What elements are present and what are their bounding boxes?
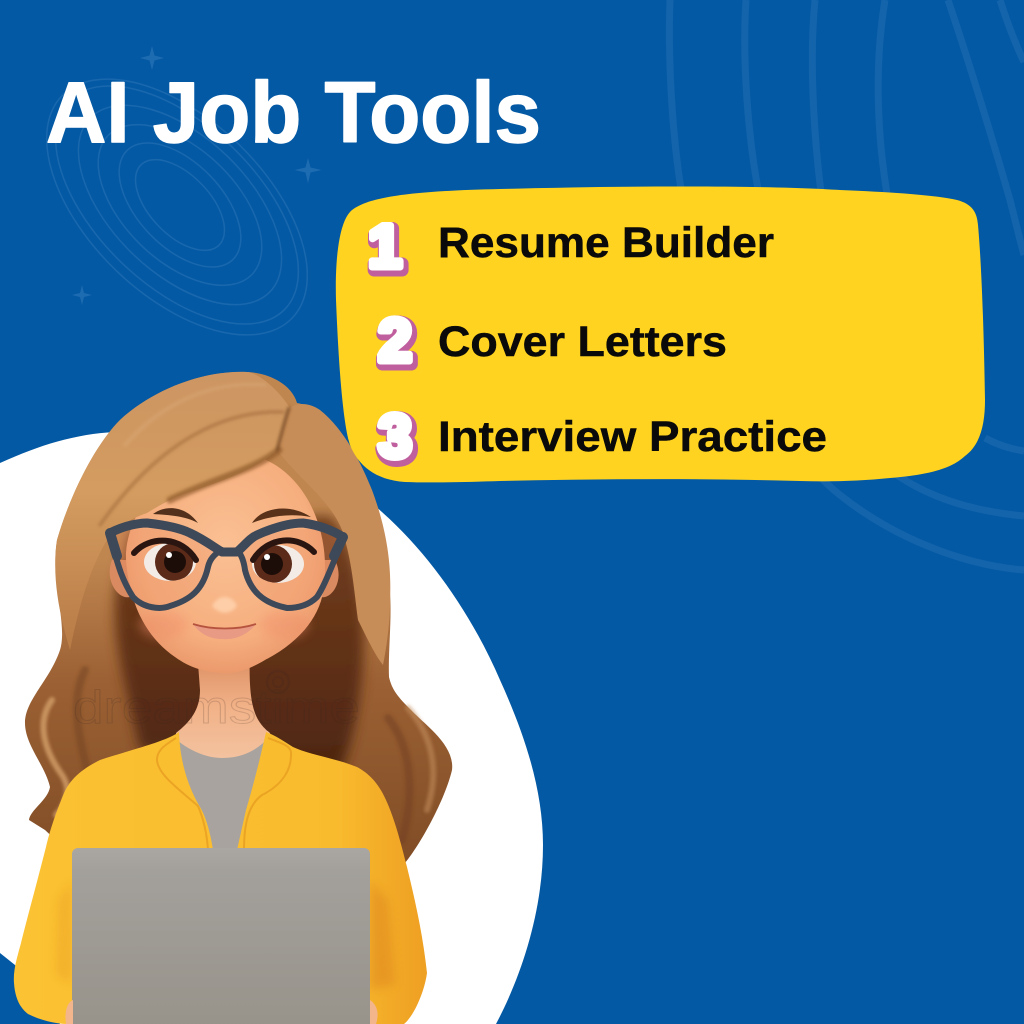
white circle backdrop bbox=[0, 432, 543, 1024]
neck bbox=[176, 650, 272, 765]
lens tint bbox=[112, 528, 341, 606]
ears bbox=[110, 560, 130, 597]
back hair bbox=[25, 372, 452, 900]
right hair section bbox=[277, 404, 390, 665]
list item 3: Interview Practice: Interview Practice bbox=[438, 413, 827, 461]
decorative sparkles bbox=[72, 46, 322, 305]
decorative spiral rings, upper left bbox=[1, 33, 353, 381]
title: AI Job Tools bbox=[46, 65, 541, 161]
hair strands bbox=[43, 670, 433, 840]
decorative curves, upper right bbox=[669, 0, 1024, 570]
sleeve shadows bbox=[56, 880, 395, 990]
front hair sweep bbox=[55, 372, 290, 650]
list item 1: Resume Builder: Resume Builder bbox=[438, 219, 774, 267]
yellow list panel bbox=[336, 186, 985, 482]
right eye bbox=[252, 545, 304, 583]
woman character illustration bbox=[14, 372, 452, 1024]
dark inner hair bbox=[115, 515, 364, 775]
yellow cardigan bbox=[14, 732, 427, 1024]
list item 1: Resume Builder: 1 bbox=[368, 213, 402, 280]
hands bbox=[65, 1000, 73, 1024]
list item 2: Cover Letters: Cover Letters bbox=[438, 318, 727, 366]
face bbox=[126, 452, 325, 673]
stock photo watermark: dreamstime bbox=[73, 681, 360, 733]
list item 3: Interview Practice: 3 bbox=[378, 403, 412, 470]
nose bbox=[212, 597, 237, 613]
list item 1: Resume Builder: 1 bbox=[370, 216, 404, 283]
list item 3: Interview Practice bbox=[378, 403, 827, 473]
grey top bbox=[172, 736, 270, 852]
list item 2: Cover Letters bbox=[378, 307, 727, 377]
cheeks bbox=[139, 611, 187, 639]
list item 2: Cover Letters: 2 bbox=[378, 307, 412, 374]
list item 1: Resume Builder bbox=[368, 213, 774, 283]
left eye bbox=[144, 544, 196, 581]
eyebrows bbox=[153, 508, 198, 523]
list item 2: Cover Letters: 2 bbox=[380, 310, 414, 377]
list item 3: Interview Practice: 3 bbox=[380, 406, 414, 473]
glasses bbox=[110, 523, 343, 608]
laptop bbox=[72, 848, 370, 1024]
mouth bbox=[193, 624, 256, 639]
hair parting shading bbox=[100, 384, 289, 525]
cardigan lapel folds bbox=[157, 738, 291, 850]
